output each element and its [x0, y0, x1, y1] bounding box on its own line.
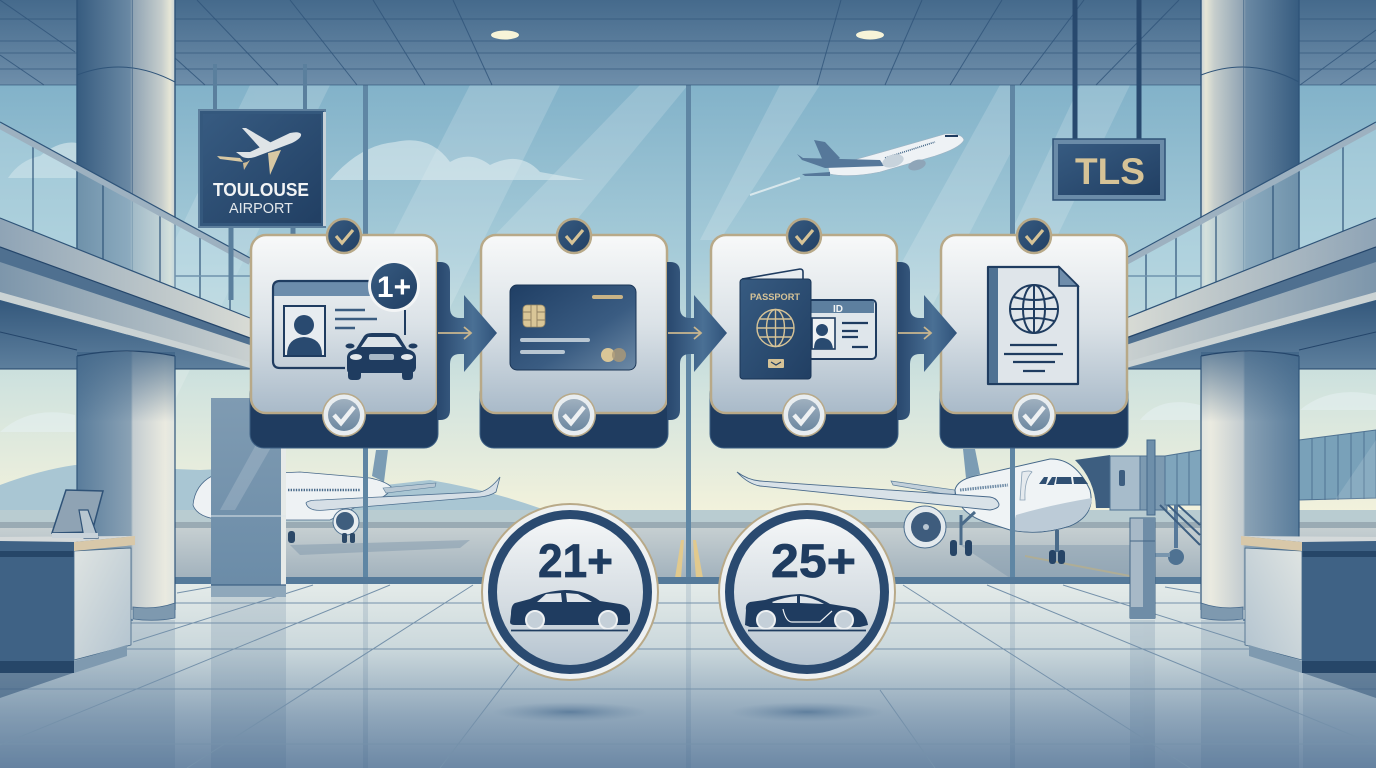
badge: 1+	[368, 260, 420, 312]
left pillar lower	[77, 351, 175, 621]
square column	[211, 398, 286, 597]
sign: TLS: TLS	[1075, 151, 1145, 192]
bottom check mark 4	[1012, 393, 1056, 437]
ceiling	[0, 0, 1376, 85]
big airplane and jet bridge right	[737, 430, 1376, 565]
top check mark 2	[557, 219, 591, 253]
apron ground	[0, 510, 1376, 578]
left balcony beam	[0, 218, 250, 369]
top check mark 4	[1017, 219, 1051, 253]
top check mark 1	[327, 219, 361, 253]
floor	[0, 584, 1376, 768]
age badge 25+ with sports car	[719, 504, 895, 680]
right pillar lower	[1201, 351, 1299, 621]
left check-in desk	[0, 536, 135, 698]
bottom check mark 1	[322, 393, 366, 437]
left balcony glass railing	[0, 122, 250, 318]
card 4: document with globe	[940, 235, 1128, 448]
left desk monitor	[52, 490, 103, 538]
icon: front of car	[346, 333, 418, 380]
arrow 1	[437, 262, 497, 420]
right terminal structures (mirrored)	[1126, 0, 1376, 698]
left pillar upper	[77, 0, 175, 352]
window frame	[0, 85, 1376, 584]
icon: licence with photo	[273, 281, 405, 368]
arrow 3	[897, 262, 957, 420]
bottom check mark 3	[782, 393, 826, 437]
clouds	[0, 140, 1376, 432]
bottom check mark 2	[552, 393, 596, 437]
flying airplane	[750, 134, 964, 195]
icon: sedan	[510, 590, 630, 630]
age badge 25+ with sports car: 25+	[771, 534, 856, 587]
sign: Toulouse Airport	[199, 64, 326, 300]
sign: Toulouse Airport: AIRPORT	[229, 200, 293, 217]
icon: sports car	[745, 594, 868, 630]
icon: ID card: ID	[833, 304, 843, 315]
sign: TLS	[1053, 0, 1165, 200]
right balcony glass railing	[1126, 122, 1376, 318]
age badge 21+ with sedan: 21+	[538, 534, 613, 587]
sign text: TOULOUSE	[213, 180, 309, 200]
right check-in desk	[1241, 536, 1376, 698]
card 1: driving licence held one year	[250, 235, 438, 448]
icon: ID card	[808, 300, 876, 359]
parked airplane left	[193, 450, 500, 543]
ceiling lights	[491, 30, 884, 40]
icon: document	[988, 267, 1078, 384]
card 3: passport and ID	[710, 235, 898, 448]
arrow 2	[667, 262, 727, 420]
badge: 1+: 1+	[377, 271, 411, 304]
distant hills	[0, 465, 545, 520]
icon: credit card	[510, 285, 636, 370]
floor shadow under 25+ badge	[729, 702, 885, 722]
sky glass reflections	[175, 85, 1130, 480]
icon: passport: PASSPORT	[750, 292, 800, 303]
left terminal structures	[0, 0, 250, 698]
floor tile lines	[0, 585, 1376, 768]
icon: passport	[740, 269, 811, 379]
right pillar upper	[1201, 0, 1299, 352]
age badge 21+ with sedan	[482, 504, 658, 680]
top check mark 3	[787, 219, 821, 253]
icon: plane on sign	[217, 128, 301, 175]
card 2: credit card	[480, 235, 668, 448]
floor reflections	[0, 584, 1376, 768]
floor shadow under 21+ badge	[492, 702, 648, 722]
right balcony beam	[1126, 218, 1376, 369]
window sky	[0, 85, 1376, 515]
bollard post right	[1130, 518, 1155, 619]
